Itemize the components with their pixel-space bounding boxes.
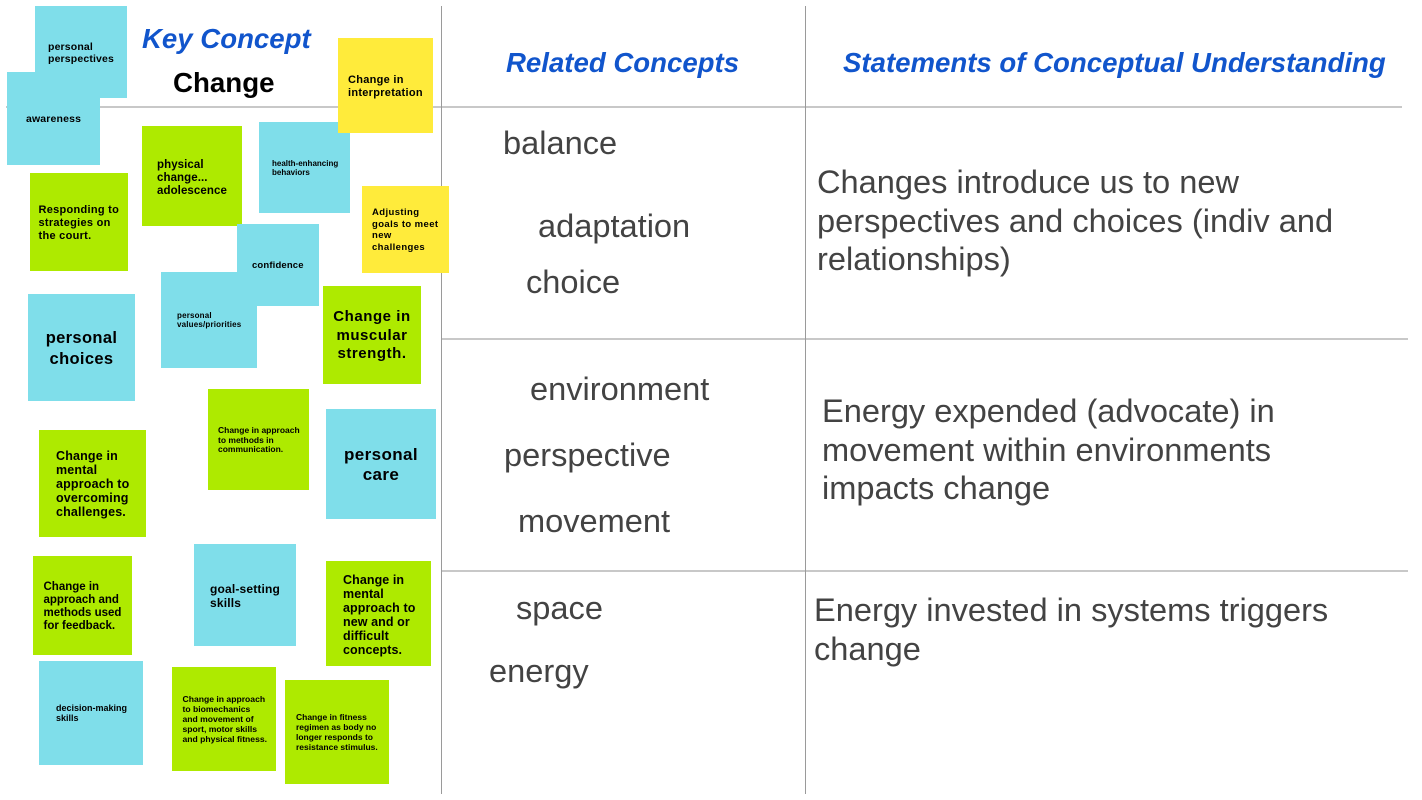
statement: energy expended	[822, 392, 1275, 506]
note: personal choices: personal	[46, 329, 117, 347]
note: fitness regimen: regimen as body no	[296, 722, 376, 732]
note: approach and methods for feedback: approach and	[44, 594, 119, 606]
note: change in interpretation: interpretation	[348, 87, 423, 99]
note: mental approach to new concepts: difficult	[343, 629, 389, 643]
note: personal care: care	[363, 465, 399, 484]
note: mental approach to new concepts: concepts.	[343, 643, 402, 657]
statement: changes: perspectives and choices (indiv and	[817, 202, 1333, 239]
heading: Key Concept: Key Concept	[142, 23, 311, 54]
note: mental approach to overcoming challenges: overcoming	[56, 491, 129, 505]
note: change in interpretation	[338, 38, 433, 133]
note: approach to methods in communication: Change in approach	[218, 425, 300, 435]
note: approach and methods for feedback: Change in	[44, 580, 99, 592]
note: responding to strategies: strategies on	[38, 216, 111, 228]
statement: energy expended: movement within environments	[822, 431, 1271, 468]
note: personal perspectives: personal	[48, 41, 93, 53]
note: awareness: awareness	[26, 113, 81, 125]
note: goal-setting skills: skills	[210, 596, 241, 610]
related concept: balance: balance	[503, 124, 617, 161]
note: change in muscular strength: muscular	[336, 326, 408, 344]
note: adjusting goals: goals to meet	[372, 219, 438, 230]
note: adjusting goals: challenges	[372, 242, 425, 253]
note: fitness regimen: Change in fitness	[296, 712, 367, 722]
note: mental approach to overcoming challenges: mental	[56, 463, 97, 477]
statement: changes: relationships)	[817, 240, 1011, 277]
note: confidence	[237, 224, 319, 306]
note: approach and methods for feedback	[33, 556, 132, 655]
related concept: energy: energy	[489, 652, 589, 689]
note: approach to methods in communication	[208, 389, 309, 490]
note: mental approach to new concepts: approach to	[343, 601, 415, 615]
note: biomechanics approach: sport, motor skills	[182, 724, 257, 734]
note: change in muscular strength	[323, 286, 421, 384]
note: mental approach to overcoming challenges	[39, 430, 146, 537]
note: personal values/priorities: personal	[177, 311, 212, 320]
statement: energy invested: change	[814, 630, 921, 667]
related concept: choice: choice	[526, 263, 620, 300]
note: approach to methods in communication: to methods in	[218, 434, 274, 444]
related concept: movement: movement	[518, 502, 670, 539]
note: mental approach to new concepts: mental	[343, 587, 384, 601]
note: mental approach to new concepts: Change in	[343, 573, 404, 587]
note: mental approach to overcoming challenges: Change in	[56, 449, 118, 463]
related concept: environment: environment	[530, 370, 709, 407]
note: responding to strategies	[30, 173, 128, 271]
note: adjusting goals	[362, 186, 449, 273]
note: mental approach to new concepts	[326, 561, 431, 666]
note: personal care: personal	[344, 445, 418, 464]
note: change in muscular strength: Change in	[333, 308, 411, 325]
note: approach and methods for feedback: for feedback.	[44, 620, 115, 632]
note: physical change adolescence: adolescence	[157, 185, 227, 197]
note: goal-setting skills	[194, 544, 296, 646]
note: change in muscular strength: strength.	[337, 345, 407, 362]
note: physical change adolescence	[142, 126, 242, 226]
note: decision-making skills: skills	[56, 713, 79, 723]
note: approach to methods in communication: communication.	[218, 444, 283, 454]
note: decision-making skills: decision-making	[56, 703, 127, 713]
note: awareness	[7, 72, 100, 165]
note: biomechanics approach	[172, 667, 276, 771]
note: approach and methods for feedback: methods used	[44, 606, 121, 618]
statement: energy expended: impacts change	[822, 469, 1050, 506]
statement: energy invested: Energy invested in systems triggers	[814, 591, 1328, 628]
heading: Related Concepts: Related Concepts	[506, 47, 739, 78]
note: decision-making skills	[39, 661, 143, 765]
related concept: perspective: perspective	[504, 436, 671, 473]
note: responding to strategies: Responding to	[38, 204, 119, 216]
note: fitness regimen	[285, 680, 389, 784]
note: health-enhancing behaviors: health-enhancing	[272, 159, 338, 168]
note: fitness regimen: longer responds to	[296, 732, 373, 742]
note: mental approach to overcoming challenges: approach to	[56, 477, 129, 491]
note: adjusting goals: Adjusting	[372, 207, 419, 218]
heading: Statements of Conceptual Understanding: Statements of Conceptual Understanding	[843, 47, 1386, 78]
note: personal perspectives: perspectives	[48, 53, 114, 65]
related concept: adaptation: adaptation	[538, 207, 690, 244]
heading: Change: Change	[173, 67, 275, 98]
note: personal values/priorities	[161, 272, 257, 368]
note: fitness regimen: resistance stimulus.	[296, 742, 378, 752]
note: goal-setting skills: goal-setting	[210, 582, 280, 596]
note: personal values/priorities: values/priorities	[177, 320, 241, 329]
statement: energy invested	[814, 591, 1328, 667]
note: personal choices	[28, 294, 135, 401]
note: personal perspectives	[35, 6, 127, 98]
note: physical change adolescence: change...	[157, 172, 208, 184]
note: biomechanics approach: and movement of	[182, 714, 254, 724]
note: physical change adolescence: physical	[157, 159, 204, 171]
note: mental approach to overcoming challenges: challenges.	[56, 505, 126, 519]
note: health-enhancing behaviors: behaviors	[272, 168, 310, 176]
note: adjusting goals: new	[372, 230, 392, 241]
note: responding to strategies: the court.	[38, 230, 91, 242]
statement: energy expended: Energy expended (advocate) in	[822, 392, 1275, 429]
note: personal care	[326, 409, 436, 519]
note: health-enhancing behaviors	[259, 122, 350, 213]
note: mental approach to new concepts: new and or	[343, 615, 410, 629]
note: confidence: confidence	[252, 260, 304, 271]
note: personal choices: choices	[50, 350, 113, 368]
statement: changes: Changes introduce us to new	[817, 163, 1239, 200]
note: change in interpretation: Change in	[348, 74, 404, 86]
related concept: space: space	[516, 589, 603, 626]
note: biomechanics approach: Change in approach	[182, 694, 265, 704]
note: biomechanics approach: to biomechanics	[182, 704, 250, 714]
statement: changes	[817, 163, 1333, 277]
note: biomechanics approach: and physical fitness.	[182, 734, 267, 744]
